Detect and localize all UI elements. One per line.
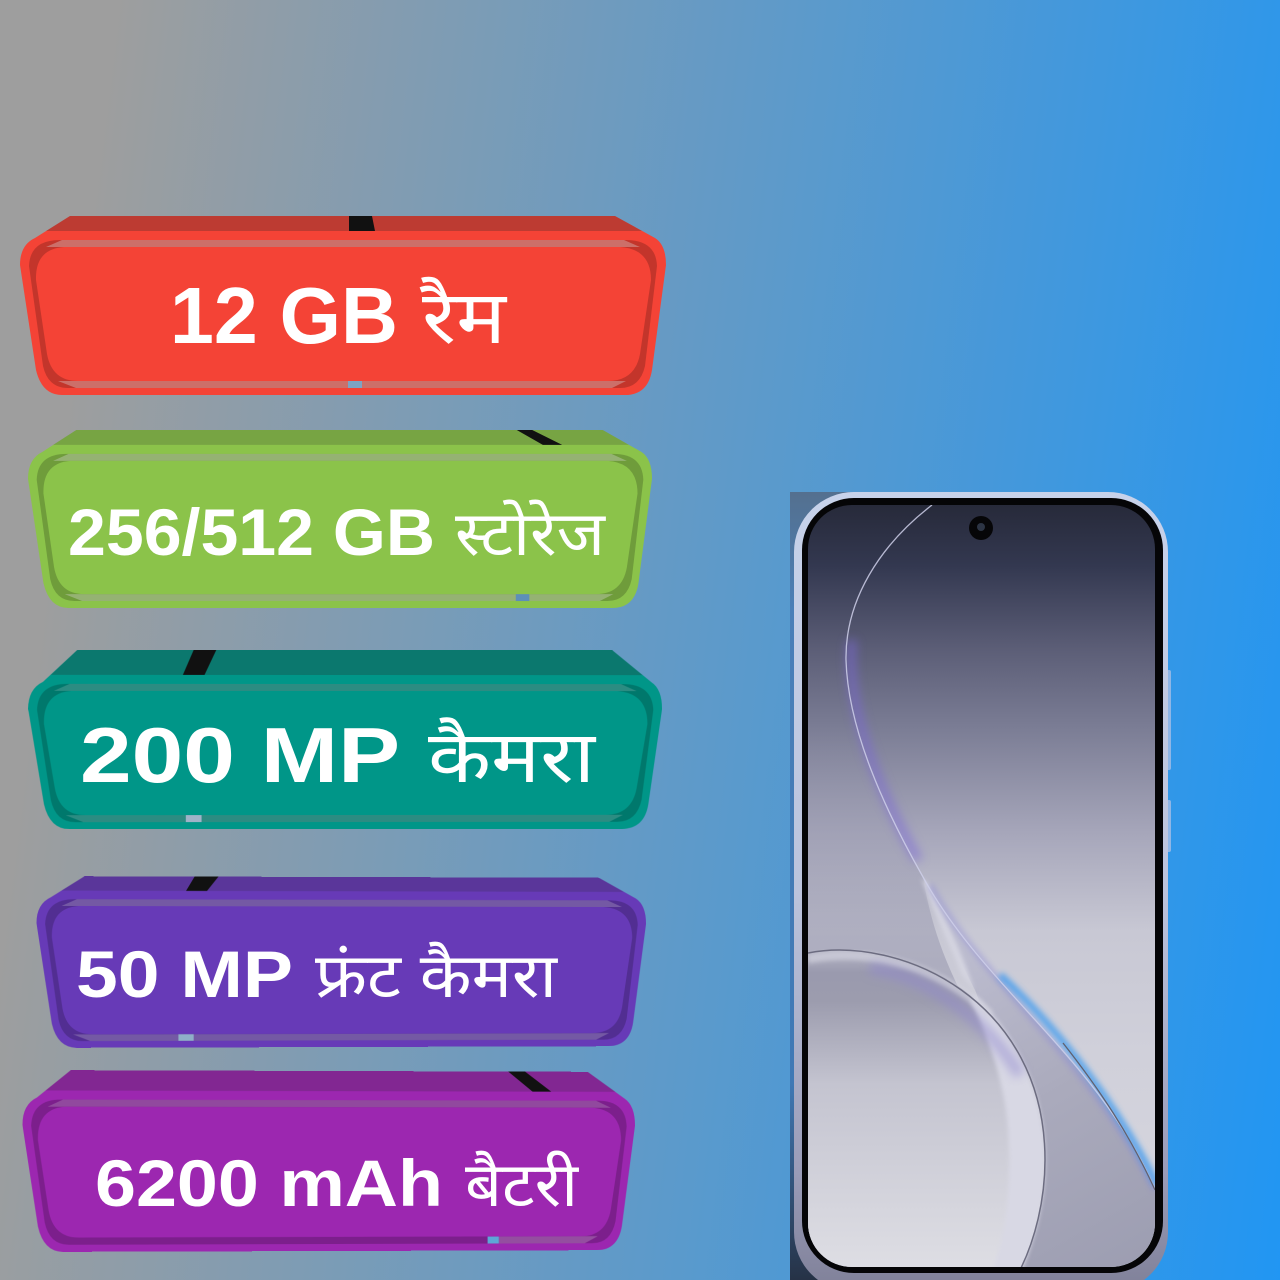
phone bezel [802, 498, 1163, 1273]
panel: 50 MP front camera badge: फ्रंट कैमरा [315, 940, 558, 1011]
panel: 6200 mAh battery badge: 6200 mAh [95, 1146, 443, 1220]
panel: 6200 mAh battery badge [22, 1070, 635, 1252]
phone illustration [790, 492, 1171, 1280]
panel: 50 MP front camera badge [36, 876, 646, 1048]
side buttons [1166, 670, 1171, 852]
panel: 200 MP camera badge: 200 MP [80, 711, 400, 799]
panel: 256/512 GB storage badge [28, 430, 652, 608]
panel: 256/512 GB storage badge: 256/512 GB [68, 495, 435, 569]
phone screen wallpaper [808, 505, 1157, 1270]
panel: 12 GB RAM badge [20, 216, 666, 395]
panel: 256/512 GB storage badge: स्टोरेज [455, 499, 606, 569]
panel: 12 GB RAM badge: रैम [419, 276, 508, 359]
front camera [969, 516, 993, 540]
panel: 12 GB RAM badge: 12 GB [170, 271, 398, 360]
panel: 200 MP camera badge [28, 650, 662, 829]
panel: 6200 mAh battery badge: बैटरी [465, 1149, 579, 1220]
phone frame [794, 492, 1168, 1280]
panel: 200 MP camera badge: कैमरा [428, 717, 597, 798]
phone back sliver [790, 492, 850, 1280]
panel: 50 MP front camera badge: 50 MP [76, 937, 293, 1011]
